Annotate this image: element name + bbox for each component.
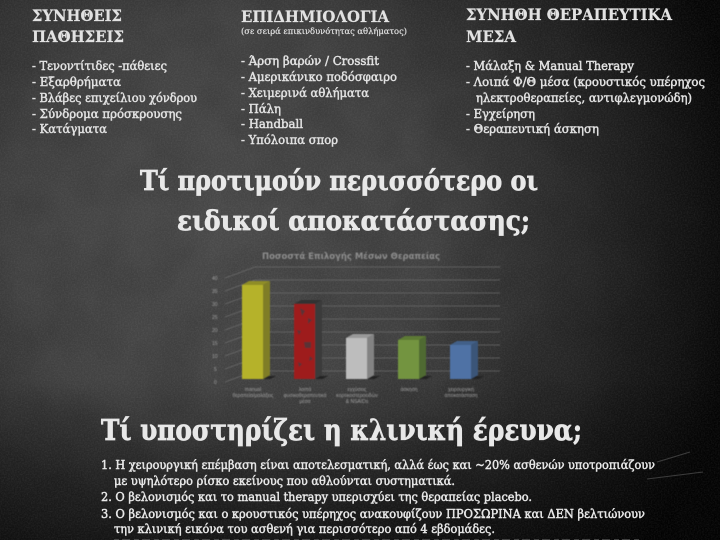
numbered list: research findings: 1. Η χειρουργική επέμβαση είναι αποτελεσματική, αλλά έως και ~20% ασθενών υποτροπιάζουν — [101, 457, 655, 472]
numbered list: research findings: 2. Ο βελονισμός και το manual therapy υπερισχύει της θεραπείας placebo. — [101, 489, 532, 504]
list: sports: - Άρση βαρών / Crossfit — [241, 53, 379, 68]
list: sports — [241, 53, 397, 147]
list: treatments: - Θεραπευτική άσκηση — [466, 121, 599, 136]
heading: common treatments: ΜΕΣΑ — [466, 27, 517, 46]
numbered list: research findings — [101, 457, 655, 536]
panel: common conditions — [32, 6, 197, 136]
bar: surgical rehabilitation — [450, 341, 484, 379]
list: treatments: - Εγχείρηση — [466, 106, 535, 121]
list: treatments: - Λοιπά Φ/Θ μέσα (κρουστικός υπέρηχος — [466, 74, 705, 89]
heading: what specialists prefer: ειδικοί αποκατάστασης; — [177, 206, 530, 237]
panel: common treatments — [466, 5, 705, 136]
heading: common conditions: ΠΑΘΗΣΕΙΣ — [32, 27, 124, 46]
bar: other physiotherapy — [294, 300, 328, 379]
bar: manual therapy — [242, 281, 276, 379]
y axis labels: 20 — [212, 328, 218, 334]
list: common conditions — [32, 58, 197, 136]
category labels: λοιπά — [299, 386, 311, 393]
heading: common conditions: ΣΥΝΗΘΕΙΣ — [32, 6, 122, 25]
numbered list: research findings: την κλινική εικόνα του ασθενή για περισσότερο από 4 εβδομάδες. — [114, 521, 495, 536]
category labels: manual — [245, 387, 261, 393]
bar: surgery — [398, 336, 432, 379]
category labels: χειρουργική — [448, 386, 474, 393]
list: sports: - Handball — [241, 116, 303, 131]
list: sports: - Πάλη — [241, 101, 281, 116]
list: common conditions: - Βλάβες επιχείλιου χόνδρου — [32, 90, 197, 105]
y axis labels: 25 — [212, 315, 218, 321]
list: treatments: - Μάλαξη & Manual Therapy — [466, 58, 635, 73]
category labels: & NSAIDs — [346, 399, 369, 405]
y axis labels — [212, 276, 218, 386]
heading: epidemiology: ΕΠΙΔΗΜΙΟΛΟΓΙΑ — [241, 7, 390, 26]
heading: common treatments: ΣΥΝΗΘΗ ΘΕΡΑΠΕΥΤΙΚΑ — [466, 5, 673, 24]
list: treatments — [466, 58, 705, 136]
gridlines — [225, 267, 500, 382]
list: common conditions: - Σύνδρομα πρόσκρουσης — [32, 106, 182, 121]
bar: corticosteroid injections — [346, 334, 380, 379]
heading: what specialists prefer: Τί προτιμούν περισσότερο οι — [140, 166, 538, 197]
y axis labels: 0 — [214, 380, 217, 386]
category labels: άσκηση — [400, 386, 418, 393]
numbered list: research findings: με υψηλότερο ρίσκο εκείνους που αθλούνται συστηματικά. — [114, 473, 455, 488]
list: sports: - Χειμερινά αθλήματα — [241, 85, 370, 100]
y axis labels: 5 — [214, 367, 217, 373]
y axis labels: 35 — [212, 289, 218, 295]
category labels: μέσα — [299, 398, 311, 405]
y axis labels: 10 — [212, 354, 218, 360]
y axis labels: 40 — [212, 276, 218, 282]
subheading: by sport risk: (σε σειρά επικινδυνότητας αθλήματος) — [241, 26, 407, 37]
panel: epidemiology — [241, 7, 407, 147]
list: sports: - Αμερικάνικο ποδόσφαιρο — [241, 69, 397, 84]
heading: common treatments — [466, 5, 673, 46]
category labels: αποκατάσταση — [445, 392, 478, 399]
heading: common conditions — [32, 6, 124, 46]
category labels: κορτικοστεροειδών — [336, 392, 378, 399]
numbered list: research findings: 3. Ο βελονισμός και ο κρουστικός υπέρηχος ανακουφίζουν ΠΡΟΣΩΡΙΝΑ και ΔΕΝ βελτιώνουν — [101, 506, 645, 521]
bar chart: treatment choice percentages — [212, 251, 500, 405]
chart title: Ποσοστά Επιλογής Μέσων Θεραπείας — [262, 251, 440, 262]
list: sports: - Υπόλοιπα σπορ — [241, 132, 338, 147]
list: common conditions: - Τενοντίτιδες -πάθειες — [32, 58, 167, 73]
list: common conditions: - Εξαρθρήματα — [32, 74, 122, 89]
category labels: εγχύσεις — [348, 386, 367, 393]
list: treatments: ηλεκτροθεραπείες, αντιφλεγμονώδη) — [476, 90, 692, 105]
heading: what clinical research supports: Τί υποστηρίζει η κλινική έρευνα; — [101, 413, 582, 447]
y axis labels: 30 — [212, 302, 218, 308]
category labels — [233, 386, 478, 405]
heading: what specialists prefer — [140, 166, 538, 237]
y axis labels: 15 — [212, 341, 218, 347]
list: common conditions: - Κατάγματα — [32, 121, 108, 136]
category labels: θεραπεία/μαλάξεις — [233, 392, 274, 399]
category labels: φυσικοθεραπευτικά — [284, 392, 327, 399]
